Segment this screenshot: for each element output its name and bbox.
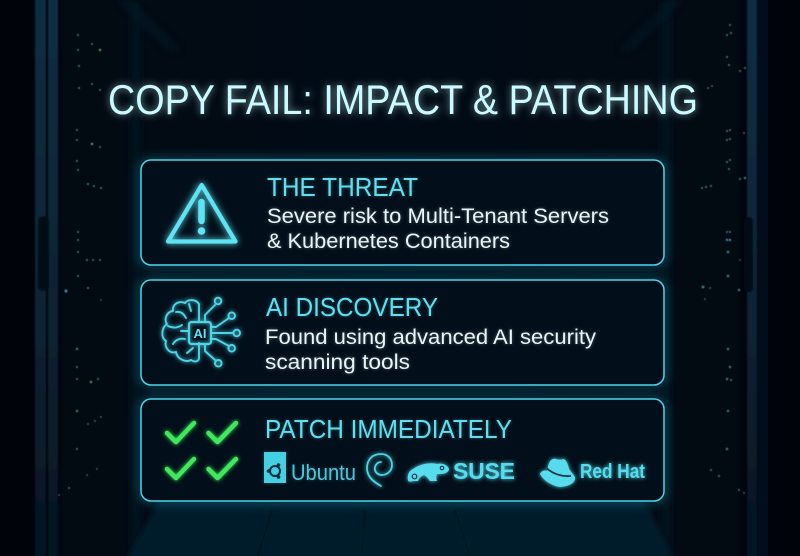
text: threat description: Severe risk to Multi-Tenant Servers	[267, 205, 609, 228]
server rack status lights, left	[58, 34, 102, 496]
text: AI discovery description: scanning tools	[265, 351, 410, 374]
logo: Red Hat: Red Hat	[580, 461, 645, 483]
title: COPY FAIL: IMPACT & PATCHING	[108, 76, 698, 123]
heading: patch immediately: PATCH IMMEDIATELY	[265, 416, 512, 444]
icon: green check marks	[167, 423, 236, 478]
logo: Ubuntu	[264, 452, 356, 485]
icon: AI brain chip	[162, 298, 240, 367]
heading: AI discovery: AI DISCOVERY	[266, 294, 438, 322]
logo: SUSE	[408, 458, 515, 484]
panel: the threat	[141, 160, 664, 265]
panel: patch immediately	[141, 399, 664, 501]
panel: AI discovery	[141, 280, 664, 385]
text: threat description: & Kubernetes Containers	[267, 230, 510, 253]
server rack status lights, right	[701, 24, 746, 494]
logo: Red Hat	[540, 459, 645, 487]
logo: Ubuntu: Ubuntu	[291, 460, 356, 485]
logo: Debian swirl	[367, 454, 392, 486]
icon: warning triangle	[168, 185, 236, 242]
logo: SUSE: SUSE	[453, 458, 515, 484]
heading: the threat: THE THREAT	[267, 174, 418, 202]
icon label: AI: AI	[194, 326, 206, 341]
text: AI discovery description: Found using advanced AI security	[265, 326, 597, 349]
